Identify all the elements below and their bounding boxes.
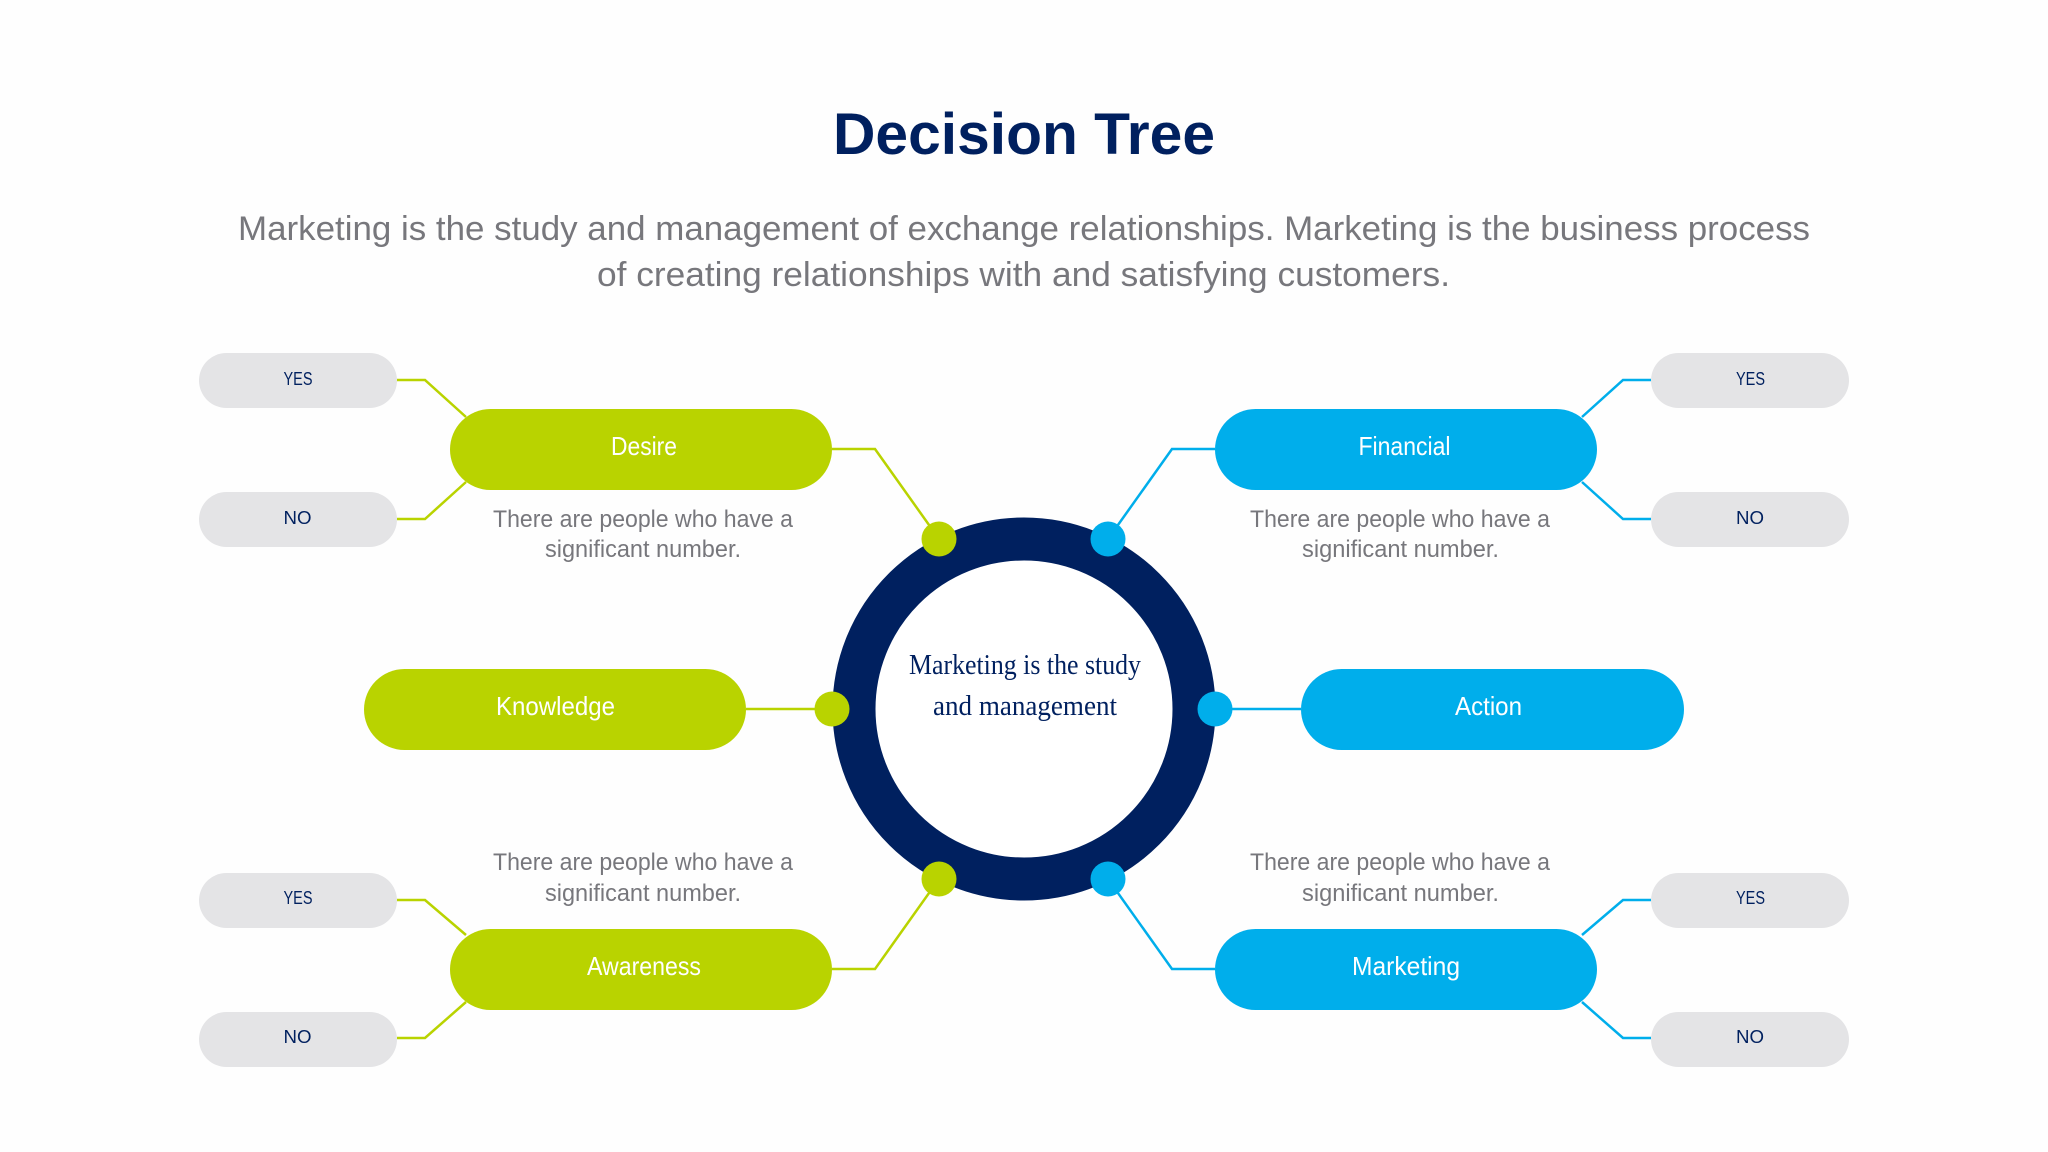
text: Desire description: significant number. bbox=[545, 536, 741, 563]
pill: Marketing bbox=[1215, 929, 1597, 1010]
pill: Awareness NO bbox=[199, 1012, 397, 1067]
branch: Awareness bbox=[199, 849, 956, 1067]
pill: Marketing YES: YES bbox=[1736, 888, 1765, 908]
branch: Desire bbox=[199, 353, 956, 563]
pill: Knowledge bbox=[364, 669, 746, 750]
pill: Action bbox=[1301, 669, 1684, 750]
branch: Action bbox=[1198, 669, 1684, 750]
text: Awareness description: There are people who have a bbox=[493, 849, 794, 876]
text: Awareness description bbox=[493, 849, 794, 907]
node: Awareness dot bbox=[922, 862, 956, 896]
pill: Awareness YES: YES bbox=[284, 888, 312, 908]
subtitle text block: Marketing is the study and management of exchange relationships. Marketing is the business process bbox=[238, 210, 1810, 248]
pill: Desire bbox=[450, 409, 832, 490]
pill: Desire NO bbox=[199, 492, 397, 547]
text: Desire description: There are people who have a bbox=[493, 506, 794, 533]
pill: Knowledge: Knowledge bbox=[496, 691, 615, 721]
node: Knowledge dot bbox=[814, 692, 850, 726]
text: Marketing description bbox=[1250, 849, 1551, 907]
pill: Desire YES bbox=[199, 353, 397, 408]
pill: Desire YES: YES bbox=[284, 369, 312, 389]
pill: Awareness: Awareness bbox=[587, 951, 701, 981]
pill: Financial NO: NO bbox=[1736, 508, 1764, 528]
pill: Awareness bbox=[450, 929, 832, 1010]
text: Financial description: significant number. bbox=[1302, 536, 1499, 563]
text: Desire description bbox=[493, 506, 794, 563]
pill: Marketing: Marketing bbox=[1352, 951, 1460, 981]
text: Awareness description: significant number. bbox=[545, 880, 741, 907]
central ring bbox=[854, 539, 1194, 879]
subtitle text block bbox=[238, 210, 1810, 294]
text: Marketing description: There are people who have a bbox=[1250, 849, 1551, 876]
pill: Desire NO: NO bbox=[284, 508, 312, 528]
pill: Marketing YES bbox=[1651, 873, 1849, 928]
node: Desire dot bbox=[922, 522, 956, 556]
pill: Financial bbox=[1215, 409, 1597, 490]
pill: Action: Action bbox=[1455, 691, 1522, 721]
branch: Marketing bbox=[1090, 849, 1849, 1067]
title: Decision Tree bbox=[833, 102, 1215, 167]
pill: Financial YES bbox=[1651, 353, 1849, 408]
text: Financial description: There are people who have a bbox=[1250, 506, 1551, 533]
pill: Financial YES: YES bbox=[1736, 369, 1765, 389]
pill: Awareness NO: NO bbox=[284, 1027, 312, 1047]
node: Financial dot bbox=[1090, 522, 1126, 556]
pill: Marketing NO bbox=[1651, 1012, 1849, 1067]
branch: Financial bbox=[1090, 353, 1849, 563]
central ring: Marketing is the study bbox=[909, 650, 1141, 681]
text: Financial description bbox=[1250, 506, 1551, 563]
node: Marketing dot bbox=[1090, 862, 1126, 896]
pill: Awareness YES bbox=[199, 873, 397, 928]
central ring: and management bbox=[933, 691, 1117, 722]
pill: Desire: Desire bbox=[611, 431, 677, 461]
pill: Marketing NO: NO bbox=[1736, 1027, 1764, 1047]
pill: Financial NO bbox=[1651, 492, 1849, 547]
branch: Knowledge bbox=[364, 669, 850, 750]
text: Marketing description: significant number. bbox=[1302, 880, 1499, 907]
node: Action dot bbox=[1198, 692, 1232, 726]
pill: Financial: Financial bbox=[1358, 431, 1450, 461]
subtitle text block: of creating relationships with and satisfying customers. bbox=[597, 256, 1450, 294]
